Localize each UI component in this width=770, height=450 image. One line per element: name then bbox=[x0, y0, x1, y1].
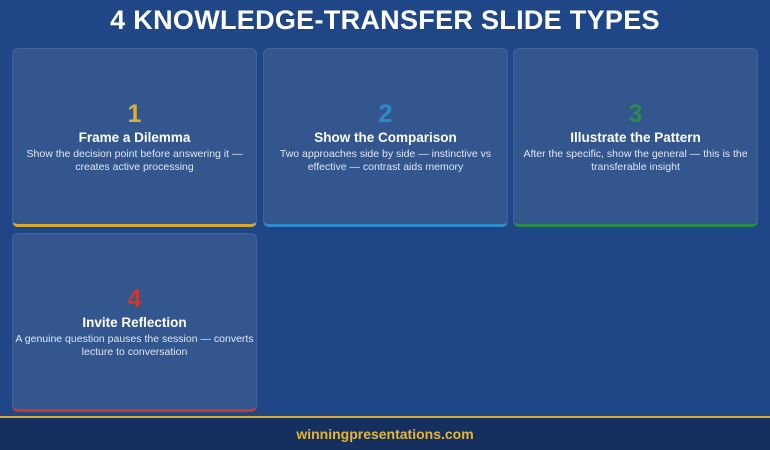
footer bbox=[0, 418, 770, 450]
title: 4 KNOWLEDGE-TRANSFER SLIDE TYPES bbox=[110, 5, 660, 35]
heading 4: Invite Reflection bbox=[82, 315, 187, 330]
desc 2: effective — contrast aids memory bbox=[308, 161, 463, 173]
desc 3 bbox=[523, 148, 748, 173]
desc 4: A genuine question pauses the session — converts bbox=[15, 333, 254, 345]
desc 4 bbox=[15, 333, 254, 358]
desc 3: After the specific, show the general — this is the bbox=[523, 148, 748, 160]
footer: winningpresentations.com bbox=[296, 426, 474, 442]
heading 3: Illustrate the Pattern bbox=[570, 130, 701, 145]
card 3 bbox=[513, 48, 758, 227]
card 2 bbox=[263, 48, 508, 227]
number 4: 4 bbox=[128, 285, 141, 313]
desc 1: Show the decision point before answering it — bbox=[27, 148, 242, 160]
desc 2: Two approaches side by side — instinctive vs bbox=[280, 148, 491, 160]
desc 4: lecture to conversation bbox=[82, 346, 187, 358]
heading 2: Show the Comparison bbox=[314, 130, 457, 145]
number 3: 3 bbox=[629, 100, 642, 128]
desc 3: transferable insight bbox=[591, 161, 680, 173]
desc 1: creates active processing bbox=[75, 161, 194, 173]
desc 1 bbox=[27, 148, 242, 173]
number 2: 2 bbox=[379, 100, 392, 128]
desc 2 bbox=[280, 148, 491, 173]
number 1: 1 bbox=[128, 100, 141, 128]
card 1 bbox=[12, 48, 257, 227]
card 4 bbox=[12, 233, 257, 412]
heading 1: Frame a Dilemma bbox=[79, 130, 190, 145]
